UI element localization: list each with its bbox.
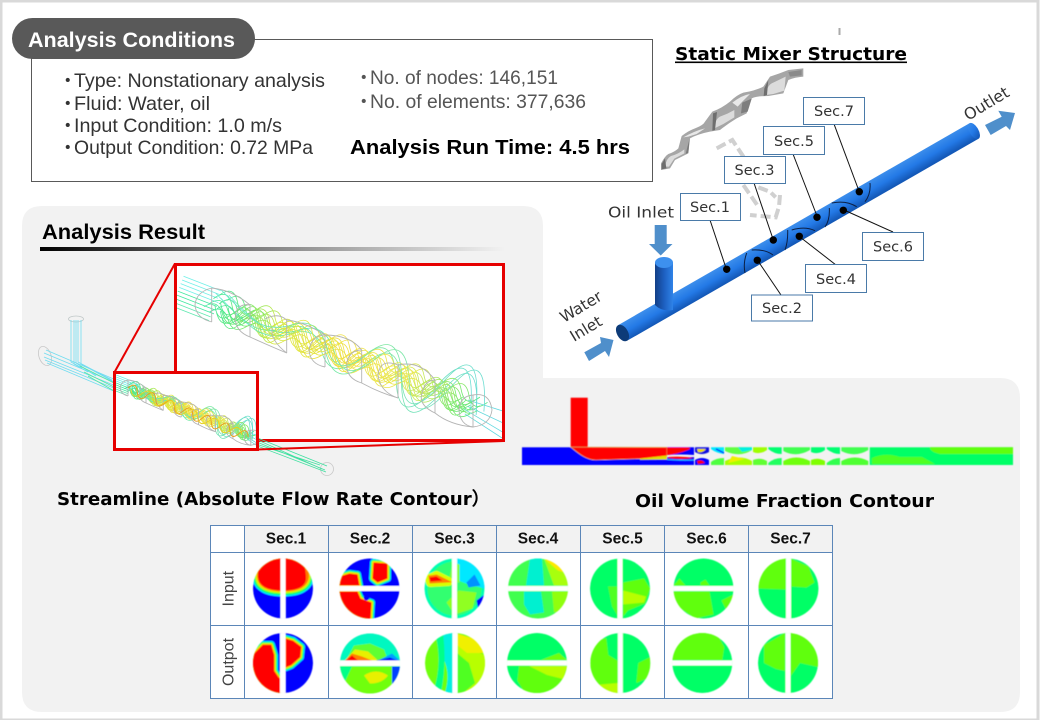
conditions list left: ・ xyxy=(58,137,78,159)
oil inlet pipe xyxy=(655,262,673,310)
conditions list left: Output Condition: 0.72 MPa xyxy=(74,137,313,159)
conditions list right: ・ xyxy=(354,91,374,113)
mixer curves xyxy=(744,183,870,273)
conditions list left: Type: Nonstationary analysis xyxy=(74,70,325,92)
label: water inlet: Water xyxy=(557,287,606,326)
icon: twisted mixer element xyxy=(661,68,803,170)
conditions list left: ・ xyxy=(58,93,78,115)
row label: output: Outpot xyxy=(220,637,238,686)
conditions list right: No. of nodes: 146,151 xyxy=(370,67,558,89)
outlet mixed section xyxy=(870,447,1013,465)
conditions list left: ・ xyxy=(58,115,78,137)
heading pill xyxy=(12,18,255,59)
disc: Sec.6 output xyxy=(671,633,733,693)
arrow: outlet xyxy=(985,111,1015,135)
zoom lines and detail frame xyxy=(114,372,504,450)
conditions list left: Fluid: Water, oil xyxy=(74,93,210,115)
conditions list left xyxy=(58,70,325,159)
column headers: Sec.4 xyxy=(518,530,559,548)
disc: Sec.3 input xyxy=(424,558,484,620)
disc: Sec.7 output xyxy=(758,632,818,694)
label: outlet: Outlet xyxy=(960,83,1013,124)
column headers: Sec.6 xyxy=(686,530,727,548)
contour discs xyxy=(251,558,818,695)
mixer silhouette xyxy=(661,68,803,170)
main pipe xyxy=(622,131,974,333)
conditions box xyxy=(32,40,652,182)
label: Sec.3 xyxy=(724,156,786,184)
conditions list right xyxy=(354,67,586,113)
oil inlet vertical xyxy=(571,398,588,448)
overview pipe streamlines xyxy=(36,316,333,476)
disc: Sec.4 output xyxy=(506,633,568,693)
disc: Sec.6 input xyxy=(672,558,734,618)
overview detail box xyxy=(116,374,256,450)
label: Sec.5: Sec.5 xyxy=(774,134,814,150)
pipe inlet end xyxy=(613,322,632,344)
disc: Sec.2 input xyxy=(338,558,400,620)
label: Sec.6: Sec.6 xyxy=(873,240,913,256)
column headers: Sec.5 xyxy=(602,530,643,548)
heading: analysis result xyxy=(40,221,505,251)
section points xyxy=(723,188,863,273)
label: Sec.1: Sec.1 xyxy=(690,200,730,216)
chart: oil volume fraction contour xyxy=(522,398,1013,465)
label: Sec.2: Sec.2 xyxy=(762,301,802,317)
diagram: pipe xyxy=(613,121,982,344)
water channel xyxy=(522,447,667,465)
arrow: water inlet xyxy=(584,337,614,361)
conditions list left: ・ xyxy=(58,70,78,92)
panel: analysis conditions xyxy=(12,18,652,182)
disc: Sec.4 input xyxy=(507,558,569,618)
caption: streamline: Streamline (Absolute Flow Rate Contour） xyxy=(57,489,490,510)
panel: analysis result background xyxy=(22,206,1020,712)
label: water inlet: Inlet xyxy=(567,312,605,345)
label: Sec.7: Sec.7 xyxy=(814,104,854,120)
label: Sec.4: Sec.4 xyxy=(816,272,856,288)
label: Sec.6 xyxy=(862,232,924,260)
table body background xyxy=(210,552,832,698)
column headers: Sec.3 xyxy=(434,530,475,548)
label: water inlet xyxy=(557,287,606,345)
disc: Sec.3 output xyxy=(425,632,485,694)
disc: Sec.7 input xyxy=(758,558,818,620)
label: Sec.5 xyxy=(764,126,824,154)
label: oil inlet: Oil Inlet xyxy=(608,204,674,222)
column headers: Sec.7 xyxy=(770,530,811,548)
label: Sec.7 xyxy=(804,98,864,124)
run time: Analysis Run Time: 4.5 hrs xyxy=(350,136,630,159)
column headers xyxy=(266,530,811,548)
label: Sec.3: Sec.3 xyxy=(735,163,774,179)
conditions list left: Input Condition: 1.0 m/s xyxy=(74,115,282,137)
mixer segments xyxy=(667,447,694,465)
column headers: Sec.1 xyxy=(266,530,307,548)
disc: Sec.2 output xyxy=(339,634,401,694)
row label: input: Input xyxy=(220,570,238,606)
disc: Sec.1 output xyxy=(251,632,313,695)
disc: Sec.5 output xyxy=(590,632,650,694)
disc: Sec.5 input xyxy=(590,558,650,620)
enlarged view box xyxy=(176,264,504,441)
conditions list right: No. of elements: 377,636 xyxy=(370,91,586,113)
heading: analysis conditions: Analysis Conditions xyxy=(28,29,235,52)
chart: streamline view xyxy=(36,257,536,476)
label: Sec.4 xyxy=(806,264,866,292)
enlarged view frame xyxy=(115,264,503,440)
heading: static mixer structure: Static Mixer Structure xyxy=(675,44,907,65)
mixer shading xyxy=(662,70,802,169)
label: Sec.1 xyxy=(680,194,740,220)
caption: oil volume: Oil Volume Fraction Contour xyxy=(635,491,934,512)
enlarged streamlines xyxy=(177,276,502,438)
arrow: dashed assembly arrow xyxy=(717,140,780,217)
label: Sec.2 xyxy=(752,295,812,321)
arrow: oil inlet xyxy=(649,225,672,256)
section leader lines xyxy=(710,124,893,295)
overview streamlines xyxy=(116,374,256,446)
column headers: Sec.2 xyxy=(350,530,390,548)
heading: analysis result: Analysis Result xyxy=(42,221,205,244)
disc: Sec.1 input xyxy=(253,558,313,620)
conditions list right: ・ xyxy=(354,67,374,89)
table: cross-section contours xyxy=(210,525,832,699)
table header background xyxy=(244,525,832,552)
